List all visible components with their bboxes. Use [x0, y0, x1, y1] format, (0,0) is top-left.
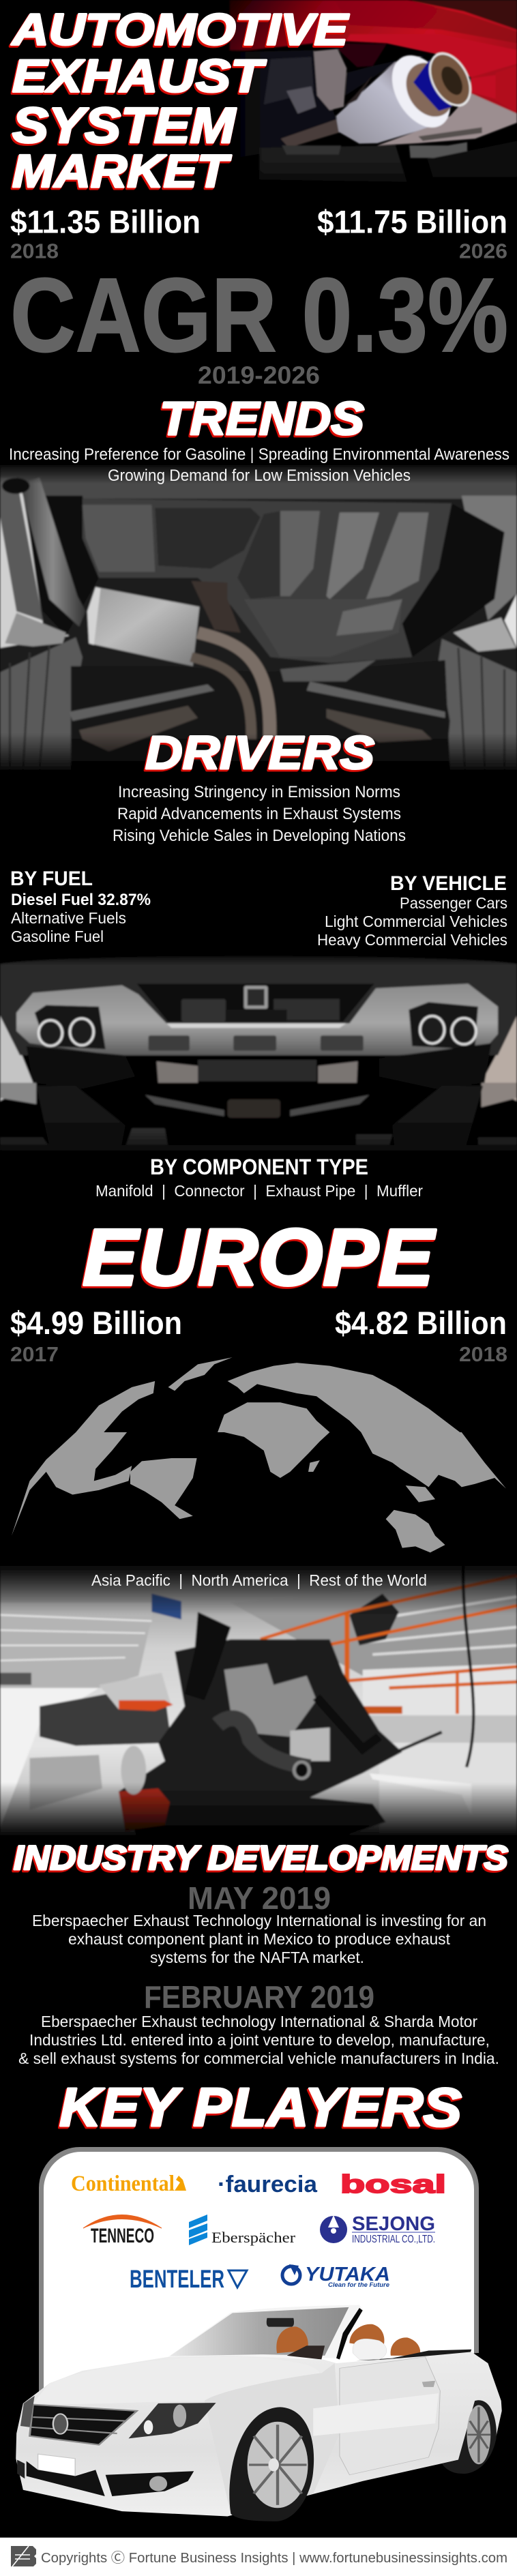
stat: Europe 2018	[335, 1305, 507, 1366]
logo: Eberspächer	[189, 2215, 296, 2246]
development: May 2019: Eberspaecher Exhaust Technology International is investing for an	[32, 1912, 486, 1929]
stat: 2018 value	[10, 203, 201, 263]
heading: europe: EUROPE	[83, 1213, 436, 1303]
title	[11, 4, 349, 197]
development: February 2019: Industries Ltd. entered into a joint venture to develop, manufacture,	[29, 2031, 490, 2049]
title line 3: SYSTEM	[12, 98, 237, 153]
icon: Fortune Business Insights logo	[11, 2546, 36, 2566]
stat: 2026 value	[317, 203, 507, 263]
development: May 2019: systems for the NAFTA market.	[150, 1949, 364, 1966]
panel: key player logos	[39, 2147, 479, 2455]
segment: by component type	[95, 1155, 423, 1200]
globe lower continents	[12, 1432, 506, 1552]
title line 2: EXHAUST	[12, 50, 267, 102]
segment: by vehicle: Passenger Cars	[400, 894, 507, 912]
development: May 2019	[32, 1880, 486, 1966]
text: drivers list: Rapid Advancements in Exhaust Systems	[117, 805, 401, 823]
logo: Eberspächer: Eberspächer	[211, 2229, 296, 2246]
text: other regions: Asia Pacific | North America | Rest of the World	[91, 1571, 427, 1589]
heading: trends: TRENDS	[160, 392, 364, 445]
logo: Continental: Continental	[71, 2172, 175, 2196]
logo: Tenneco	[83, 2215, 162, 2247]
logo: Faurecia: ·faurecia	[218, 2172, 318, 2197]
development: February 2019: & sell exhaust systems for commercial vehicle manufacturers in India.	[18, 2049, 499, 2067]
globe map	[12, 1357, 506, 1552]
segment: by fuel: Gasoline Fuel	[11, 928, 104, 945]
segment: by fuel	[10, 868, 151, 945]
title line 4: MARKET	[12, 145, 232, 197]
photo: car underbody and muffler	[0, 462, 517, 786]
segment: by component type: Manifold | Connector | Exhaust Pipe | Muffler	[95, 1182, 423, 1200]
heading: drivers: DRIVERS	[145, 726, 374, 779]
illustration: white convertible car	[16, 2305, 502, 2521]
photo: engine assembly line	[0, 1563, 517, 1848]
stat: 2026 value: $11.75 Billion	[317, 203, 507, 240]
development: May 2019: MAY 2019	[188, 1880, 331, 1916]
stat: 2018 value: 2018	[10, 239, 59, 263]
stat: 2018 value: $11.35 Billion	[10, 203, 201, 240]
logo: Yutaka	[282, 2264, 390, 2288]
logo: Sejong Industrial: INDUSTRIAL CO.,LTD.	[352, 2234, 435, 2245]
globe upper continents	[76, 1357, 460, 1432]
logo: Sejong Industrial: SEJONG	[352, 2213, 435, 2235]
development: February 2019: FEBRUARY 2019	[144, 1979, 374, 2015]
logo: Sejong Industrial	[320, 2213, 435, 2245]
segment: by vehicle: BY VEHICLE	[390, 872, 507, 895]
stat: Europe 2017: 2017	[10, 1342, 59, 1366]
logo: Yutaka: Clean for the Future	[328, 2281, 389, 2288]
stat: Europe 2017	[10, 1305, 182, 1366]
title line 1: AUTOMOTIVE	[11, 4, 349, 55]
copyright text: Copyrights Ⓒ Fortune Business Insights | www.fortunebusinessinsights.com	[41, 2550, 507, 2566]
stat: Europe 2018: $4.82 Billion	[335, 1305, 507, 1341]
segment: by component type: BY COMPONENT TYPE	[150, 1155, 368, 1179]
segment: by fuel: BY FUEL	[10, 868, 93, 890]
photo: exhaust tip under red car	[228, 0, 517, 209]
black base below car	[0, 2353, 517, 2537]
photo: rear bumper with quad exhaust tips	[0, 952, 517, 1168]
segment: by fuel: Diesel Fuel 32.87%	[11, 891, 151, 909]
segment: by vehicle	[317, 872, 507, 949]
development: May 2019: exhaust component plant in Mexico to produce exhaust	[68, 1930, 451, 1948]
logo: Tenneco: TENNECO	[91, 2225, 154, 2247]
segment: by fuel: Alternative Fuels	[11, 909, 126, 927]
development: February 2019: Eberspaecher Exhaust technology International & Sharda Motor	[41, 2013, 477, 2030]
development: February 2019	[18, 1979, 499, 2067]
stat: Europe 2017: $4.99 Billion	[10, 1305, 182, 1341]
logo: Bosal: bosal	[340, 2170, 446, 2198]
text: trends list	[9, 445, 509, 485]
logo: Benteler: BENTELER	[130, 2265, 224, 2293]
text: drivers list: Increasing Stringency in Emission Norms	[118, 783, 400, 801]
stat: Europe 2018: 2018	[459, 1342, 507, 1366]
footer	[0, 2537, 517, 2576]
heading: key players: KEY PLAYERS	[59, 2077, 462, 2137]
segment: by vehicle: Light Commercial Vehicles	[325, 913, 507, 930]
CAGR figure: 2019-2026	[198, 361, 320, 389]
text: drivers list: Rising Vehicle Sales in Developing Nations	[113, 827, 406, 845]
segment: by vehicle: Heavy Commercial Vehicles	[317, 931, 507, 949]
heading: industry developments: INDUSTRY DEVELOPMENTS	[14, 1839, 508, 1877]
logo: Yutaka: YUTAKA	[305, 2264, 390, 2285]
stat: 2026 value: 2026	[459, 239, 507, 263]
text: trends list: Growing Demand for Low Emission Vehicles	[108, 467, 411, 485]
text: drivers list	[113, 783, 406, 845]
